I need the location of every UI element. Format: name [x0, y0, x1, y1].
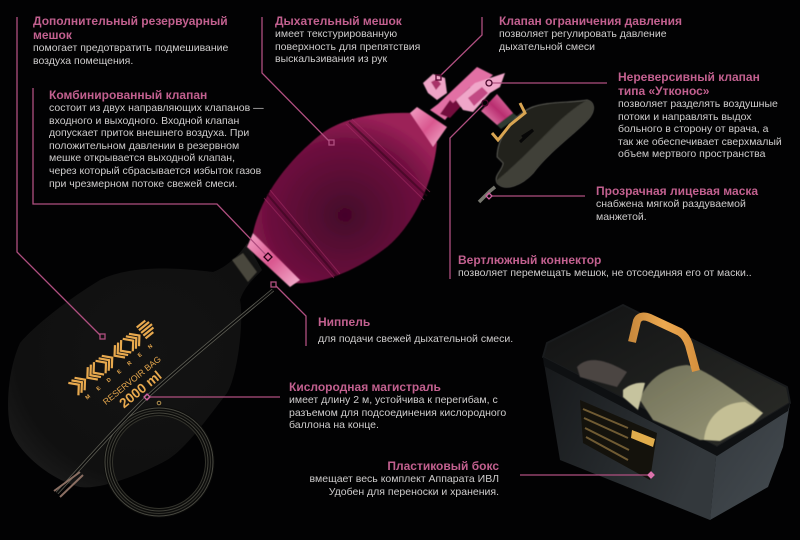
text: reservoir bag: Дополнительный резервуарный: [33, 14, 228, 28]
text: breathing bag: выскальзивания из рук: [275, 53, 387, 65]
connector: nipple: [271, 282, 306, 346]
text: non-reversible valve: так же обеспечивает сверхмалый: [618, 136, 782, 148]
text: oxygen line: [289, 380, 506, 431]
logo on reservoir bag: 2000 ml: [116, 368, 165, 411]
text: combined valve: входного и выходного. Входной клапан: [49, 115, 239, 127]
text: combined valve: положительном давлении в резервном: [49, 140, 239, 152]
box label: [580, 400, 657, 480]
text: plastic box: Пластиковый бокс: [387, 459, 499, 473]
box handle: [632, 317, 696, 371]
text: oxygen line: Кислородная магистраль: [289, 380, 441, 394]
text: face mask: манжетой.: [596, 211, 647, 223]
text: combined valve: мешке открывается выходной клапан,: [49, 152, 235, 164]
text: oxygen line: баллона на конце.: [289, 419, 379, 431]
box contents: [577, 360, 763, 441]
connector: pressure valve: [436, 17, 482, 80]
text: plastic box: [310, 459, 499, 498]
text: swivel connector: [458, 253, 752, 279]
text: oxygen line: имеет длину 2 м, устойчива к перегибам, с: [289, 394, 498, 406]
connector: plastic box: [520, 472, 654, 478]
text: reservoir bag: мешок: [33, 28, 72, 42]
text: plastic box: Удобен для переноски и хранения.: [329, 486, 499, 498]
connector: oxygen line: [144, 394, 280, 400]
text: breathing bag: имеет текстурированную: [275, 28, 397, 40]
logo on reservoir bag: [68, 319, 184, 428]
text: breathing bag: поверхность для препятствия: [275, 41, 420, 53]
text: pressure valve: Клапан ограничения давления: [499, 14, 682, 28]
valve assembly: [423, 67, 518, 129]
text: swivel connector: Вертлюжный коннектор: [458, 253, 601, 267]
connector: breathing bag: [262, 17, 334, 145]
text: reservoir bag: помогает предотвратить подмешивание: [33, 42, 228, 54]
text: face mask: снабжена мягкой раздуваемой: [596, 198, 746, 210]
logo on reservoir bag: MEDEREN: [85, 338, 161, 401]
text: non-reversible valve: объем мертвого пространства: [618, 148, 765, 160]
text: combined valve: допускает приток внешнего воздуха. При: [49, 127, 249, 139]
text: non-reversible valve: больного в сторону от врача, а: [618, 123, 768, 135]
text: combined valve: через который сбрасывается избыток газов: [49, 165, 261, 177]
text: combined valve: Комбинированный клапан: [49, 88, 207, 102]
connector: swivel: [450, 100, 488, 279]
text: reservoir bag: [33, 14, 228, 67]
connector: combined valve: [33, 88, 272, 261]
text: face mask: Прозрачная лицевая маска: [596, 184, 758, 198]
face mask: [479, 100, 593, 202]
text: plastic box: вмещает весь комплект Аппарата ИВЛ: [310, 473, 499, 485]
text: pressure valve: дыхательной смеси: [499, 41, 595, 53]
logo on reservoir bag: RESERVOIR BAG: [101, 354, 163, 407]
text: non-reversible valve: позволяет разделять воздушные: [618, 98, 778, 110]
text: nipple: [318, 315, 513, 345]
text: face mask: [596, 184, 758, 223]
text: combined valve: [49, 88, 264, 190]
connector: non-reversible valve: [486, 80, 607, 86]
connector: reservoir bag: [17, 17, 105, 339]
text: swivel connector: позволяет перемещать мешок, не отсоединяя его от маски..: [458, 267, 752, 279]
reservoir bag: [8, 243, 262, 487]
text: non-reversible valve: Нереверсивный клапан: [618, 70, 760, 84]
text: breathing bag: [275, 14, 420, 65]
oxygen line: [54, 290, 273, 516]
text: reservoir bag: воздуха помещения.: [33, 55, 133, 67]
text: combined valve: состоит из двух направляющих клапанов —: [49, 102, 264, 114]
text: non-reversible valve: потоки и направлять выдох: [618, 111, 752, 123]
text: pressure valve: [499, 14, 682, 53]
plastic box: [543, 305, 790, 520]
text: non-reversible valve: [618, 70, 782, 160]
breathing bag: [247, 107, 447, 287]
text: nipple: Ниппель: [318, 315, 370, 329]
text: nipple: для подачи свежей дыхательной смеси.: [318, 333, 513, 345]
connector: mask: [486, 193, 585, 199]
text: oxygen line: разъемом для подсоединения кислородного: [289, 407, 506, 419]
text: non-reversible valve: типа «Утконос»: [618, 84, 709, 98]
text: breathing bag: Дыхательный мешок: [275, 14, 402, 28]
text: pressure valve: позволяет регулировать давление: [499, 28, 667, 40]
text: combined valve: при чрезмерном потоке свежей смеси.: [49, 178, 237, 190]
